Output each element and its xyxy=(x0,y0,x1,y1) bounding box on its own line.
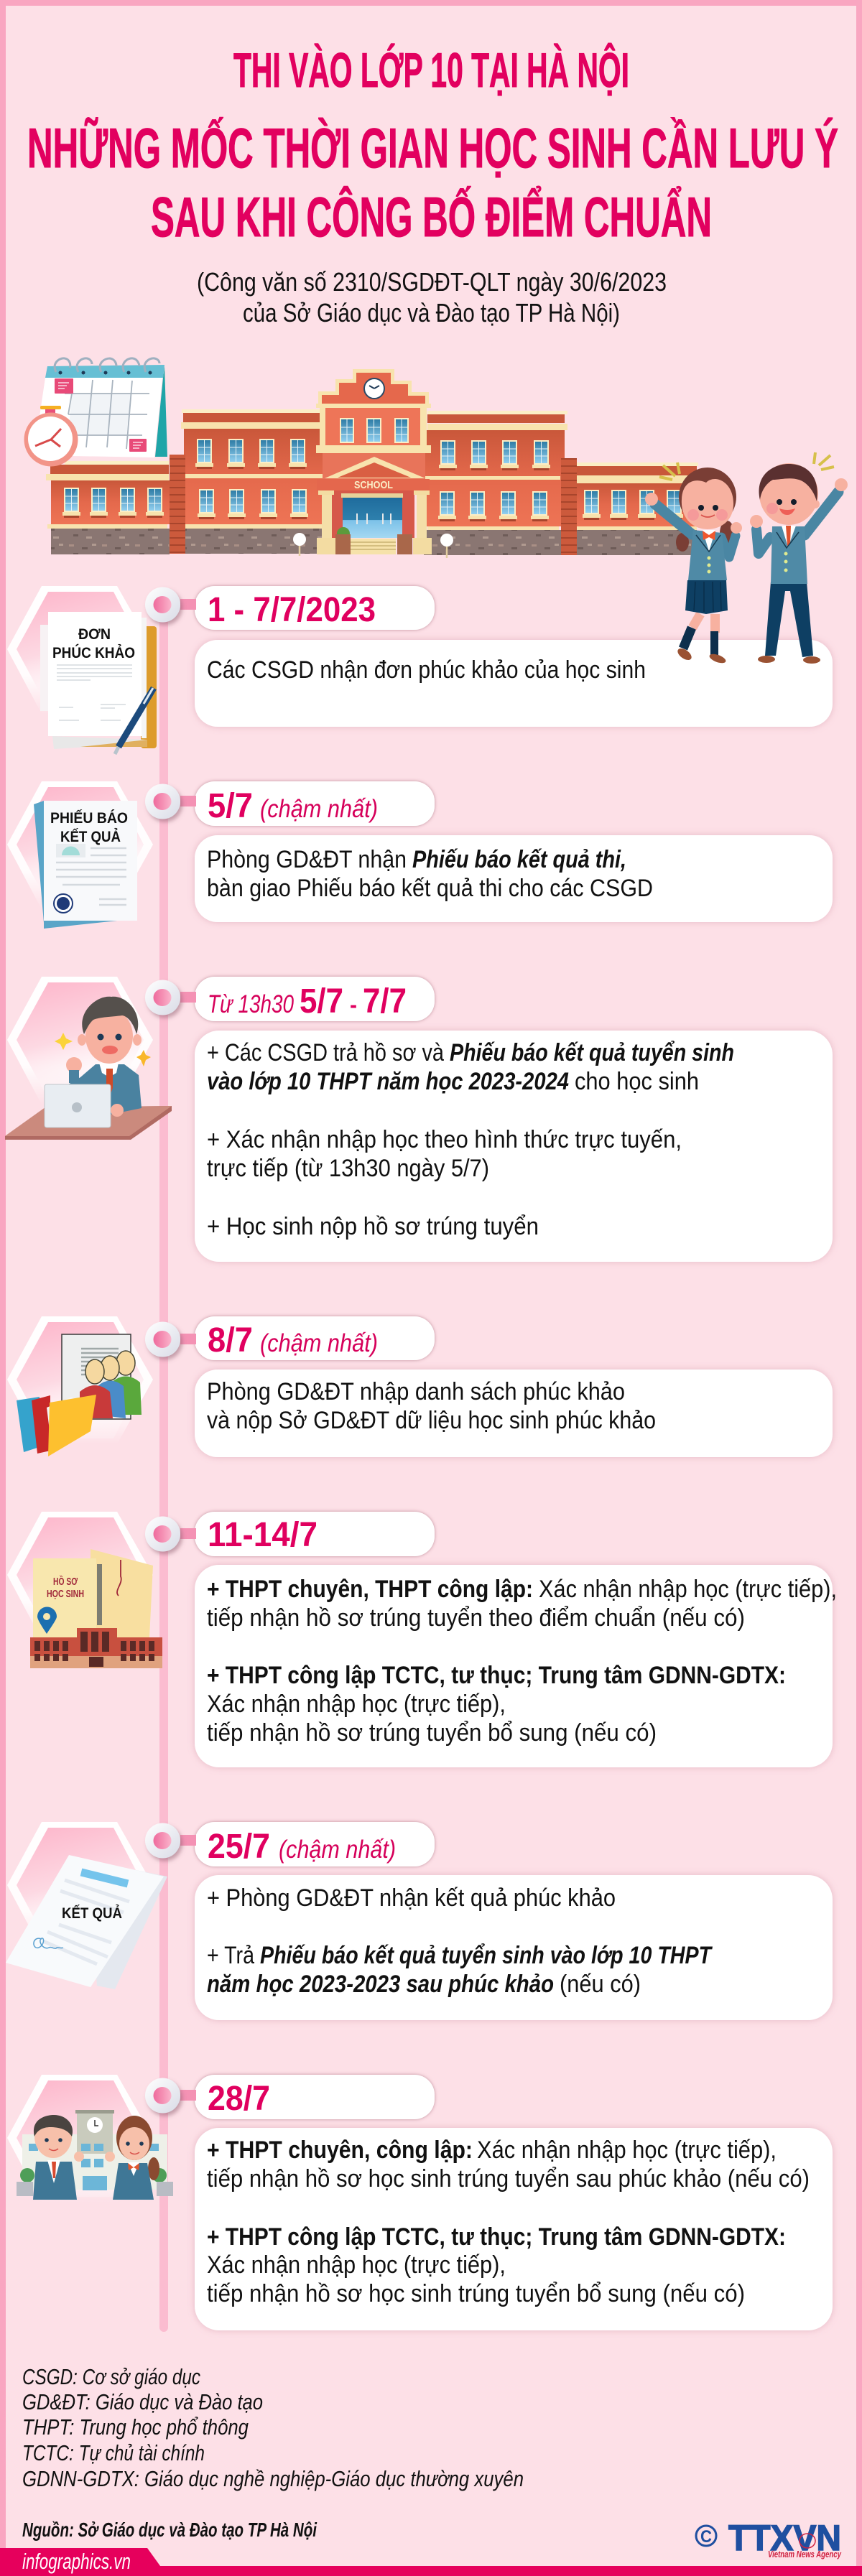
card xyxy=(195,1875,833,2020)
icon: application form: ĐƠN xyxy=(78,626,111,643)
brick pillar left xyxy=(170,455,185,554)
icon: result document: KẾT QUẢ xyxy=(62,1905,122,1922)
source: Nguồn: Sở Giáo dục và Đào tạo TP Hà Nội xyxy=(22,2519,318,2541)
brick pillar right xyxy=(561,458,577,555)
body text: + Phòng GD&ĐT nhận kết quả phúc khảo xyxy=(207,1884,616,1912)
icon: application form: PHÚC KHẢO xyxy=(52,644,135,661)
date: 11-14/7 xyxy=(208,1516,318,1554)
timeline node xyxy=(145,1823,196,1859)
icon: list and folders xyxy=(17,1334,142,1456)
date: - xyxy=(350,992,357,1018)
card xyxy=(195,835,833,922)
timeline node xyxy=(145,784,196,819)
body text: và nộp Sở GD&ĐT dữ liệu học sinh phúc khảo xyxy=(207,1407,656,1434)
date pill xyxy=(195,1512,435,1556)
columns xyxy=(318,490,334,495)
legend: abbreviations: GDNN-GDTX: Giáo dục nghề nghiệp-Giáo dục thường xuyên xyxy=(22,2466,524,2491)
icon: application form xyxy=(40,612,157,754)
body text: vào lớp 10 THPT năm học 2023-2024 xyxy=(207,1068,569,1095)
right wing xyxy=(577,462,698,466)
icon: result slip: PHIẾU BÁO xyxy=(50,810,128,827)
body text: Xác nhận nhập học (trực tiếp), xyxy=(477,2136,777,2164)
student: girl xyxy=(645,462,742,665)
body text: Xác nhận nhập học (trực tiếp), xyxy=(539,1576,837,1603)
central tower xyxy=(318,369,429,404)
card xyxy=(195,2128,833,2330)
legend: abbreviations: CSGD: Cơ sở giáo dục xyxy=(22,2364,200,2389)
icon: result slip: KẾT QUẢ xyxy=(60,829,121,845)
hexagon background xyxy=(7,977,153,1105)
icon: result slip xyxy=(34,801,137,929)
body text: + Học sinh nộp hồ sơ trúng tuyển xyxy=(207,1213,539,1240)
body text: tiếp nhận hồ sơ học sinh trúng tuyển bổ sung (nếu có) xyxy=(207,2280,745,2307)
footer band xyxy=(0,2548,862,2576)
tower clock xyxy=(364,378,384,399)
timeline bar xyxy=(159,596,168,2332)
date: 5/7 xyxy=(300,982,343,1020)
date note: (chậm nhất) xyxy=(260,1329,378,1357)
logo: TTXVN: TTXVN xyxy=(728,2518,841,2558)
body text xyxy=(207,1576,837,1747)
hexagon background xyxy=(7,586,153,714)
body text: Xác nhận nhập học (trực tiếp), xyxy=(207,1691,506,1718)
left wing xyxy=(50,465,169,474)
date: 5/7 xyxy=(208,787,253,825)
date pill xyxy=(195,1316,435,1360)
panel: item 4 xyxy=(7,1316,833,1457)
date: 1 - 7/7/2023 xyxy=(208,591,376,629)
icon: student records and school xyxy=(30,1549,162,1668)
body text xyxy=(207,1884,713,1998)
date: 8/7 xyxy=(208,1321,253,1359)
hexagon background xyxy=(7,2075,153,2203)
body text: tiếp nhận hồ sơ trúng tuyển theo điểm chuẩn (nếu có) xyxy=(207,1604,745,1632)
icon: student records and school: HỌC SINH xyxy=(47,1588,84,1600)
date pill xyxy=(195,2075,435,2119)
planters xyxy=(337,527,350,540)
card xyxy=(195,640,833,727)
body text: năm học 2023-2023 sau phúc khảo xyxy=(207,1971,554,1998)
panel: item 5 xyxy=(7,1512,837,1767)
timeline node xyxy=(145,980,196,1015)
icon: student records and school: HỒ SƠ xyxy=(53,1575,78,1588)
body text xyxy=(207,2136,810,2307)
legend: abbreviations: THPT: Trung học phổ thông xyxy=(22,2414,249,2440)
subtitle: (Công văn số 2310/SGDĐT-QLT ngày 30/6/2023 xyxy=(197,267,667,297)
body text: trực tiếp (từ 13h30 ngày 5/7) xyxy=(207,1155,489,1182)
body text xyxy=(207,1039,734,1240)
subtitle: của Sở Giáo dục và Đào tạo TP Hà Nội) xyxy=(243,298,620,327)
student: boy xyxy=(33,2115,84,2200)
logo: TTXVN: C xyxy=(700,2527,712,2547)
legend: abbreviations xyxy=(22,2364,524,2491)
body text: Xác nhận nhập học (trực tiếp), xyxy=(207,2251,506,2279)
student: girl xyxy=(105,2116,159,2200)
date pill xyxy=(195,1822,435,1866)
student: boy xyxy=(750,452,848,664)
body text: + THPT công lập TCTC, tư thục; Trung tâm GDNN-GDTX: xyxy=(207,2223,786,2251)
date note: (chậm nhất) xyxy=(279,1836,396,1864)
title xyxy=(27,42,838,248)
card xyxy=(195,1031,833,1262)
timeline node xyxy=(145,1517,196,1551)
body text: (nếu có) xyxy=(560,1971,641,1998)
body text: + Trả xyxy=(207,1942,254,1969)
pediment xyxy=(325,457,425,478)
illustration: calendar xyxy=(34,358,167,457)
date: 7/7 xyxy=(363,982,407,1020)
panel: item 2 xyxy=(7,781,833,929)
footer band: infographics.vn xyxy=(22,2549,131,2574)
legend: abbreviations: GD&ĐT: Giáo dục và Đào tạo xyxy=(22,2389,263,2414)
body text: Phòng GD&ĐT nhận xyxy=(207,846,407,873)
icon: result document xyxy=(6,1855,167,1989)
body text: tiếp nhận hồ sơ trúng tuyển bổ sung (nếu có) xyxy=(207,1719,657,1747)
body text xyxy=(207,846,653,902)
panel: item 6 xyxy=(6,1822,833,2020)
body text: bàn giao Phiếu báo kết quả thi cho các CSGD xyxy=(207,875,653,902)
date xyxy=(208,982,407,1020)
body text: Phòng GD&ĐT nhập danh sách phúc khảo xyxy=(207,1378,625,1405)
date pill xyxy=(195,977,435,1021)
illustration: school building xyxy=(46,369,698,558)
timeline node xyxy=(145,2078,196,2113)
panel: item 7 xyxy=(7,2075,833,2330)
hexagon background xyxy=(7,781,153,909)
date: 28/7 xyxy=(208,2080,270,2118)
body text: Phiếu báo kết quả thi, xyxy=(412,846,626,873)
panel: item 1 xyxy=(7,586,833,754)
body text: + Các CSGD trả hồ sơ và xyxy=(207,1039,444,1066)
body text: tiếp nhận hồ sơ học sinh trúng tuyển sau phúc khảo (nếu có) xyxy=(207,2165,810,2193)
body text: + THPT công lập TCTC, tư thục; Trung tâm GDNN-GDTX: xyxy=(207,1662,786,1689)
illustration: two students xyxy=(645,452,848,665)
legend: abbreviations: TCTC: Tự chủ tài chính xyxy=(22,2440,205,2465)
icon: student at laptop xyxy=(5,997,172,1140)
card xyxy=(195,1565,833,1767)
panel: item 3 xyxy=(5,977,833,1262)
body text: cho học sinh xyxy=(575,1068,699,1095)
card xyxy=(195,1370,833,1457)
hexagon background xyxy=(7,1822,153,1950)
body text: + Xác nhận nhập học theo hình thức trực tuyến, xyxy=(207,1126,682,1153)
stairs xyxy=(350,539,396,554)
central right block xyxy=(427,411,567,414)
subtitle xyxy=(197,267,667,327)
hexagon background xyxy=(7,1512,153,1640)
body text: Phiếu báo kết quả tuyển sinh vào lớp 10 THPT xyxy=(260,1942,713,1969)
timeline node xyxy=(145,1321,196,1357)
body text: Các CSGD nhận đơn phúc khảo của học sinh xyxy=(207,656,646,684)
school sign: SCHOOL xyxy=(354,479,393,491)
body text: Phiếu báo kết quả tuyển sinh xyxy=(450,1039,734,1066)
illustration: stopwatch xyxy=(24,406,78,467)
body text: + THPT chuyên, THPT công lập: xyxy=(207,1576,533,1603)
body text xyxy=(207,1378,656,1434)
date pill xyxy=(195,586,435,630)
date: 25/7 xyxy=(208,1828,270,1866)
date pill xyxy=(195,781,435,826)
icon: students at school xyxy=(17,2110,173,2200)
body text: + THPT chuyên, công lập: xyxy=(207,2136,473,2164)
lamps xyxy=(300,542,447,558)
timeline node xyxy=(145,587,196,622)
date note: (chậm nhất) xyxy=(260,795,378,823)
date: Từ 13h30 xyxy=(208,990,294,1018)
central left block xyxy=(182,409,320,413)
hexagon background xyxy=(7,1316,153,1444)
